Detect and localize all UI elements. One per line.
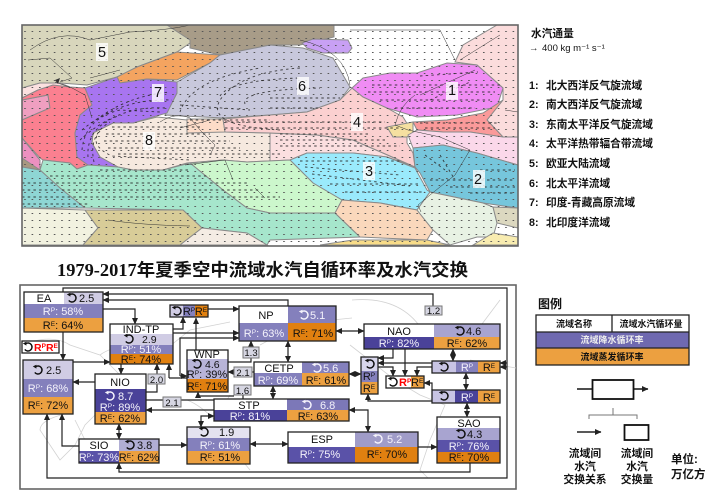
basin box: NP: R	[293, 328, 301, 340]
legend: flux scale	[529, 27, 605, 54]
panel: legend	[536, 297, 706, 486]
basin box: red label: R	[411, 377, 419, 389]
legend sample box: 流域水汽循环量	[619, 318, 683, 329]
legend: basin names: 7:	[529, 197, 539, 209]
basin box: ESP: R	[367, 449, 375, 461]
basin box: SAO: SAO	[457, 418, 481, 430]
basin box: NAO: P	[387, 339, 391, 346]
basin box: IND-TP: IND-TP	[123, 324, 159, 336]
legend caption: exchange amount: 水汽	[626, 459, 648, 473]
exchange value labels	[148, 306, 442, 409]
basin box: IND-TP: R	[121, 344, 129, 356]
basin box: lower-right: R	[483, 392, 491, 404]
basin box: EA: : 64%	[55, 320, 83, 332]
region numbers: 1	[448, 83, 456, 99]
basin box: mid-right: R	[461, 362, 469, 374]
region numbers: 3	[365, 164, 373, 180]
basin box: IND-TP: R	[121, 354, 129, 366]
basin box: EA: P	[51, 307, 55, 314]
box: unnamed basin red labels: P	[42, 343, 47, 350]
legend: basin names	[529, 79, 653, 229]
basin box: WNP: R	[187, 369, 195, 381]
basin box: NIO: : 62%	[112, 413, 140, 425]
coastlines	[28, 25, 518, 226]
legend arrow key	[577, 431, 601, 433]
basin box: vertical: P	[371, 372, 375, 379]
basin box: CETP: : 69%	[270, 375, 298, 387]
basin box: WNP: 4.6	[205, 359, 220, 371]
basin box: NAO: NAO	[387, 326, 411, 338]
basin box: STP: R	[230, 411, 238, 423]
basin box: STP: E	[306, 412, 311, 419]
basin box: 1.9: 1.9	[219, 427, 234, 439]
basin box: STP: : 63%	[310, 411, 338, 423]
basin box: ESP: E	[375, 450, 380, 457]
basin regions	[22, 25, 518, 245]
region numbers: 7	[154, 85, 162, 101]
title: 1979-2017年夏季空中流域水汽自循环率及水汽交换	[57, 260, 468, 280]
basin box: 1.9: P	[208, 441, 212, 448]
legend sample box: 流域蒸发循环率	[580, 351, 644, 362]
basin box: left ocean 2.5: : 68%	[40, 383, 68, 395]
basin box: ESP: R	[300, 449, 308, 461]
basin box: SIO: R	[119, 452, 127, 464]
basin box: SIO: : 73%	[91, 452, 119, 464]
wind vector field	[22, 25, 518, 246]
legend box key	[624, 425, 648, 440]
basin box: 1.9: R	[200, 440, 208, 452]
basin box: NP: : 63%	[256, 328, 284, 340]
unit note	[671, 452, 706, 481]
legend: basin names: 北太平洋流域	[546, 177, 610, 190]
basin box: WNP: R	[187, 381, 195, 393]
basin box: ESP: : 70%	[379, 449, 407, 461]
legend bracket	[589, 408, 637, 419]
basin box: NAO	[364, 324, 500, 350]
box: unnamed basin red labels: E	[54, 343, 59, 350]
region numbers	[96, 43, 485, 188]
panel: moisture flux basin map	[22, 25, 518, 246]
basin box: IND-TP: E	[129, 355, 134, 362]
legend caption: exchange relation	[563, 446, 607, 486]
basin box: SIO: 3.8	[137, 440, 152, 452]
box: unnamed basin red labels	[22, 341, 59, 354]
basin box: IND-TP: : 51%	[133, 344, 161, 356]
basin box: NP: R	[244, 328, 252, 340]
basin box: vertical: R	[363, 383, 371, 395]
basin box: NIO: : 89%	[112, 402, 140, 414]
basin box: EA: R	[43, 320, 51, 332]
basin box: WNP: : 71%	[199, 381, 227, 393]
legend caption: exchange amount	[621, 446, 653, 486]
legend: basin names: 北印度洋流域	[546, 216, 610, 229]
region numbers: 5	[98, 45, 106, 61]
basin box: NAO: 4.6	[466, 326, 481, 338]
basin box: NP: NP	[258, 310, 274, 322]
legend: basin names: 北大西洋反气旋流域	[546, 79, 643, 92]
panel: moisture exchange diagram	[20, 285, 516, 489]
basin box: left ocean 2.5: E	[36, 401, 41, 408]
basin box: ESP: P	[308, 450, 312, 457]
basin box: mid-right: E	[491, 363, 496, 370]
basin box: left ocean 2.5: R	[28, 400, 36, 412]
basin box: STP: P	[238, 412, 242, 419]
basin box: WNP	[187, 349, 228, 393]
legend caption: exchange amount: 交换量	[621, 472, 653, 486]
basin box: WNP: E	[195, 382, 200, 389]
basin box: red label	[386, 376, 424, 389]
legend: basin names: 东南太平洋反气旋流域	[546, 118, 653, 131]
legend caption: exchange relation: 交换关系	[563, 472, 607, 486]
region numbers: 4	[353, 115, 361, 131]
basin box: SIO	[79, 439, 159, 464]
basin box: SAO: P	[457, 442, 461, 449]
exchange value labels: 2.1	[165, 398, 179, 409]
basin box: ESP: ESP	[311, 434, 333, 446]
basin box: NAO: : 82%	[391, 338, 419, 350]
basin box: NIO: 8.7	[118, 391, 133, 403]
basin box: vertical: E	[371, 384, 376, 391]
legend: basin names: 1:	[529, 80, 539, 92]
basin box: NIO	[95, 374, 146, 425]
basin box: ESP: : 75%	[312, 449, 340, 461]
basin box: EA: : 58%	[55, 306, 83, 318]
basin box: NAO: : 62%	[459, 338, 487, 350]
basin box: CETP: CETP	[264, 363, 294, 375]
basin box: vertical	[361, 357, 378, 395]
basin box: left ocean 2.5: : 72%	[40, 400, 68, 412]
basin box: STP: 6.8	[320, 400, 335, 412]
legend: flux scale: 水汽通量	[531, 27, 574, 40]
basin box: NAO: R	[447, 338, 455, 350]
basin box: NIO: E	[108, 414, 113, 421]
unit note: 万亿方	[671, 467, 706, 481]
basin box: SIO: SIO	[90, 440, 109, 452]
basin box: IND-TP: P	[129, 345, 133, 352]
basin box: EA: E	[51, 321, 56, 328]
basin box: top small	[170, 305, 208, 318]
legend: basin names: 欧亚大陆流域	[546, 157, 610, 170]
basin box: red label: P	[407, 378, 412, 385]
basin box: EA	[24, 292, 103, 332]
basin box: lower-right: E	[491, 393, 496, 400]
legend sample box	[536, 315, 689, 365]
basin box: EA: 2.5	[79, 293, 94, 305]
exchange value labels: 1.6	[236, 386, 249, 397]
box: unnamed basin red labels: R	[34, 342, 42, 354]
basin box: 1.9: R	[200, 452, 208, 464]
legend: basin names: 8:	[529, 217, 539, 229]
legend heading: 图例	[538, 297, 562, 311]
basin box: vertical: R	[363, 371, 371, 383]
basin box: 1.9: E	[208, 453, 213, 460]
basin box: STP: : 81%	[242, 411, 270, 423]
basin box: top small: R	[183, 306, 191, 318]
basin box: lower-right	[432, 390, 500, 404]
unit note: 单位:	[671, 452, 698, 466]
legend: basin names: 6:	[529, 178, 539, 190]
basin box: CETP: R	[258, 375, 266, 387]
basin box: SAO: E	[457, 453, 462, 460]
exchange value labels: 1.3	[244, 348, 258, 359]
basin box: SIO: P	[87, 453, 91, 460]
basin box: SAO	[437, 417, 500, 464]
basin box: EA: EA	[37, 293, 52, 305]
basin box: top small: R	[195, 306, 203, 318]
basin box: lower-right: R	[461, 392, 469, 404]
basin box: NIO: R	[100, 402, 108, 414]
basin box: SAO: R	[449, 452, 457, 464]
basin box: NP: E	[301, 329, 306, 336]
basin box: NIO: NIO	[110, 377, 130, 389]
basin box: SAO: 4.3	[467, 429, 482, 441]
basin box: top small: P	[191, 307, 195, 314]
basin box: mid-right: R	[483, 362, 491, 374]
basin box: ESP: 5.2	[387, 434, 402, 446]
basin box: CETP: P	[266, 376, 270, 383]
basin box: SIO: : 62%	[131, 452, 159, 464]
basin box: IND-TP: : 74%	[133, 354, 161, 366]
region numbers: 8	[145, 133, 153, 149]
basin box: CETP	[254, 362, 349, 387]
basin box: CETP: E	[314, 376, 319, 383]
exchange value labels: 2.1	[236, 368, 250, 379]
basin box: SAO: : 76%	[461, 441, 489, 453]
basin box: WNP: WNP	[194, 349, 220, 361]
region numbers: 2	[474, 172, 482, 188]
basin box: NIO: P	[108, 403, 112, 410]
basin box: STP: R	[298, 411, 306, 423]
legend sample box: 流域名称	[556, 318, 592, 329]
basin box: STP	[214, 399, 349, 423]
basin box: mid-right	[432, 361, 500, 374]
legend caption: exchange relation: 水汽	[574, 459, 596, 473]
basin box: 1.9: : 61%	[212, 440, 240, 452]
basin box: IND-TP: 2.9	[142, 334, 157, 346]
legend: flux scale: →	[529, 43, 538, 54]
basin box: SIO: R	[79, 452, 87, 464]
basin box: WNP: : 39%	[199, 369, 227, 381]
legend caption: exchange relation: 流域间	[569, 446, 601, 460]
basin box: left ocean 2.5: R	[28, 383, 36, 395]
basin box: left ocean 2.5: 2.5	[46, 365, 61, 377]
basin box: CETP: R	[306, 375, 314, 387]
basin box: CETP: 5.6	[323, 363, 338, 375]
legend: basin names: 3:	[529, 119, 539, 131]
basin box: NIO: R	[100, 413, 108, 425]
basin box: SAO: R	[449, 441, 457, 453]
basin box: EA: R	[43, 306, 51, 318]
basin box: lower-right: P	[469, 393, 473, 400]
legend: basin names: 印度-青藏高原流域	[546, 196, 635, 209]
basin box: STP: STP	[238, 400, 260, 412]
basin box: red label: E	[419, 378, 424, 385]
legend arrow through box	[577, 380, 648, 399]
region numbers: 6	[298, 79, 306, 95]
legend caption: exchange amount: 流域间	[621, 446, 653, 460]
basin box: mid-right: P	[469, 363, 473, 370]
box: unnamed basin red labels: R	[46, 342, 54, 354]
basin box: left ocean 2.5: P	[36, 384, 40, 391]
basin box: 1.9: : 51%	[212, 452, 240, 464]
legend: basin names: 4:	[529, 138, 539, 150]
basin box: NP	[239, 306, 336, 341]
exchange value labels: 1.2	[427, 306, 440, 317]
map frame	[22, 25, 518, 246]
legend: basin names: 2:	[529, 99, 539, 111]
legend sample box: 流域降水循环率	[580, 334, 644, 345]
basin box: IND-TP	[110, 324, 173, 366]
basin box: 1.9	[187, 427, 250, 464]
legend: basin names: 太平洋热带辐合带流域	[546, 137, 653, 150]
basin box: SIO: E	[127, 453, 132, 460]
basin box: WNP: P	[195, 370, 199, 377]
streamlines of moisture flux	[22, 68, 515, 204]
basin box: left ocean 2.5	[23, 360, 73, 414]
background world map	[30, 300, 516, 478]
basin box: NP: : 71%	[305, 328, 333, 340]
legend: basin names: 5:	[529, 158, 539, 170]
exchange value labels: 2.0	[150, 375, 163, 386]
basin box: top small: E	[203, 307, 208, 314]
basin box: ESP	[288, 432, 418, 463]
legend: flux scale: 400 kg m⁻¹ s⁻¹	[542, 43, 605, 54]
basin box: NP: P	[252, 329, 256, 336]
basin box: NAO: R	[379, 338, 387, 350]
basin box: NAO: E	[455, 339, 460, 346]
legend: basin names: 南大西洋反气旋流域	[546, 98, 643, 111]
basin box: SAO: : 70%	[461, 452, 489, 464]
basin box: red label: R	[399, 377, 407, 389]
connector arrows	[47, 288, 507, 478]
basin box: CETP: : 61%	[318, 375, 346, 387]
basin box: NP: 5.1	[310, 310, 325, 322]
